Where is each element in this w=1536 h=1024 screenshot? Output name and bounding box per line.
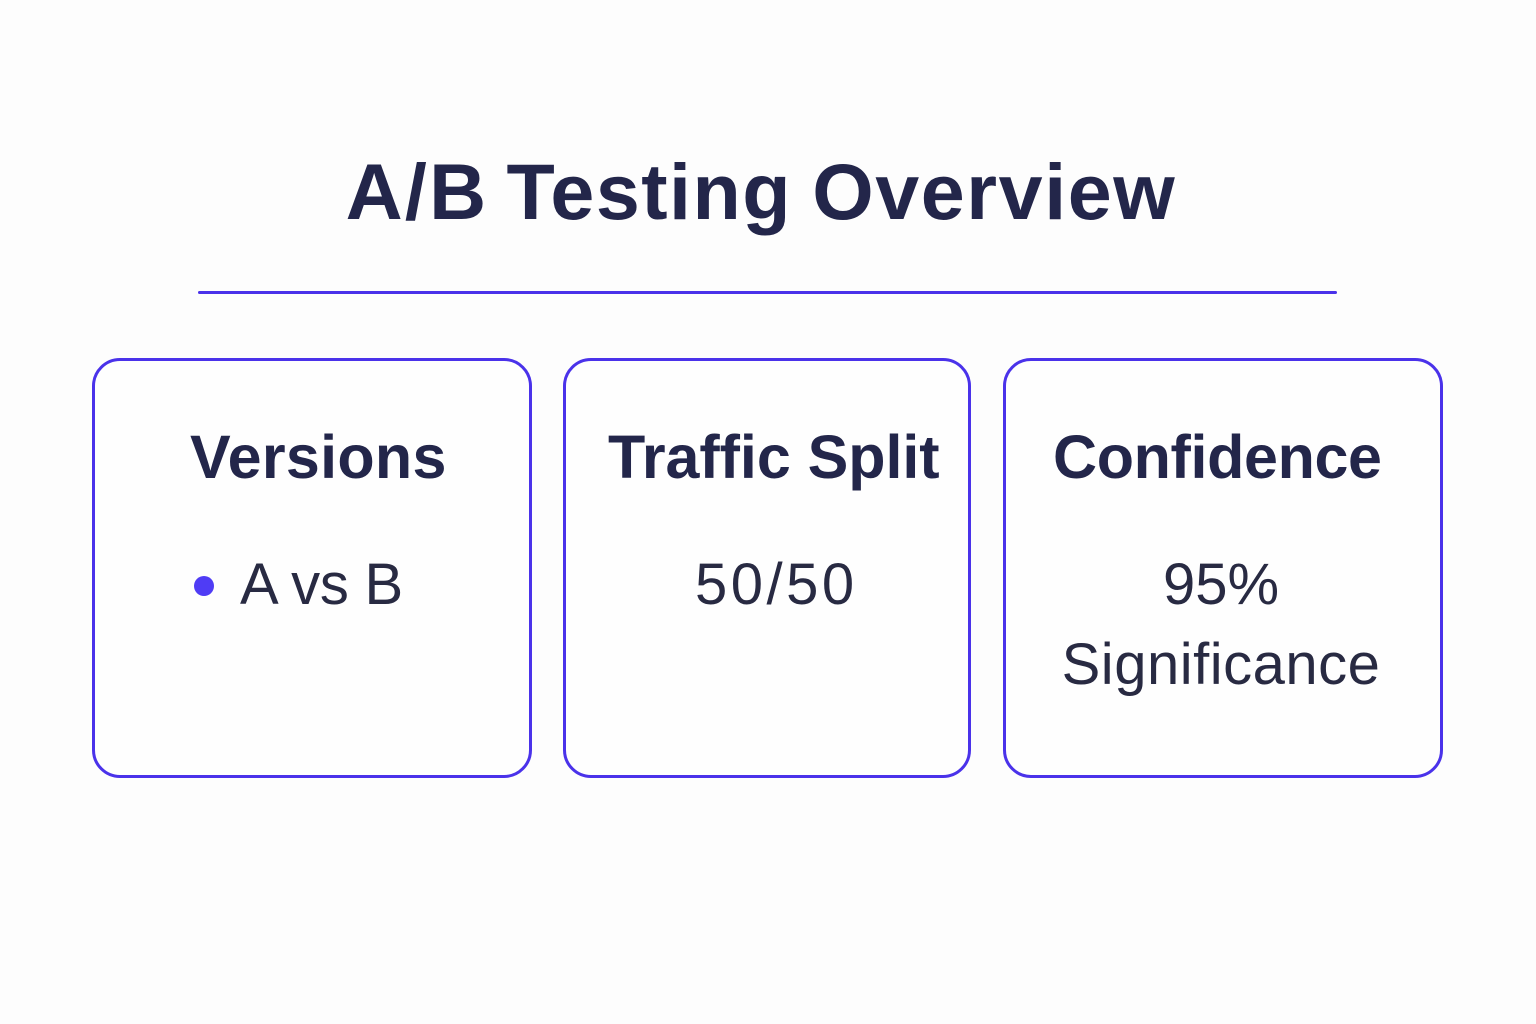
panel: versions — [92, 358, 532, 778]
text: 95% significance: Significance — [1062, 632, 1380, 697]
panel: traffic split — [563, 358, 971, 778]
heading: confidence: Confidence — [1053, 423, 1382, 491]
panel: confidence — [1003, 358, 1443, 778]
text: 95% significance — [1062, 552, 1380, 697]
heading: versions: Versions — [190, 423, 447, 491]
text: 95% significance: 95% — [1163, 552, 1279, 617]
text: 50/50: 50/50 — [695, 552, 858, 617]
text: A vs B: A vs B — [240, 552, 403, 617]
title: A/B Testing Overview — [346, 147, 1176, 236]
icon: bullet — [194, 576, 214, 596]
heading: traffic split: Traffic Split — [608, 423, 940, 491]
title divider — [198, 291, 1337, 294]
